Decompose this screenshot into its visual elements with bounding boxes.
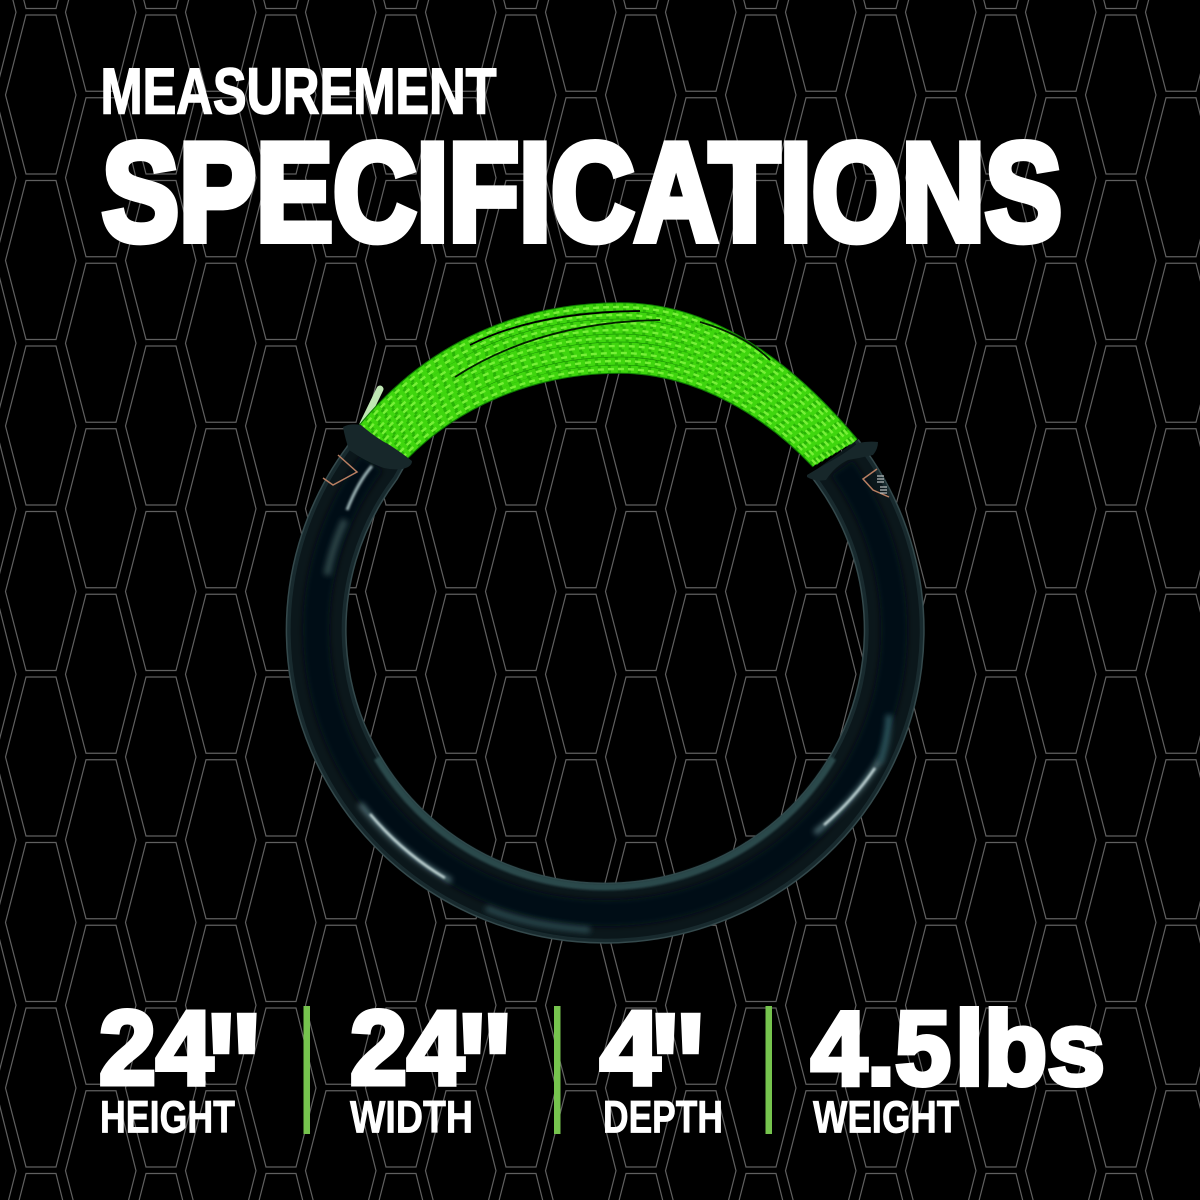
- green twisted wire bundle: [361, 307, 854, 464]
- pale leader tip: [363, 389, 380, 424]
- label: DEPTH: [603, 1092, 723, 1142]
- right copper logo badge: [863, 469, 889, 497]
- label: WIDTH: [350, 1092, 473, 1142]
- left copper logo badge: [323, 455, 357, 485]
- right flange: [807, 442, 878, 481]
- spec: height: [99, 982, 263, 1150]
- left flange: [343, 424, 412, 469]
- divider: [304, 1006, 310, 1134]
- unit: lbs: [955, 990, 1105, 1108]
- spec: depth: [600, 982, 723, 1150]
- spec: width: [350, 982, 514, 1150]
- inch mark: ": [649, 982, 707, 1150]
- title: [100, 54, 1062, 270]
- value: 4: [600, 990, 660, 1107]
- divider: [554, 1006, 560, 1134]
- inch mark: ": [205, 982, 263, 1150]
- inch mark: ": [456, 982, 514, 1150]
- divider: [766, 1006, 772, 1134]
- value: 24: [99, 990, 213, 1107]
- tube highlights: [360, 804, 451, 881]
- label: HEIGHT: [100, 1092, 235, 1142]
- label: WEIGHT: [813, 1092, 959, 1142]
- spec: weight: [811, 990, 1105, 1142]
- black tube housing: [316, 447, 894, 930]
- value: 4.5: [811, 990, 951, 1108]
- value: 24: [350, 990, 464, 1107]
- product: coiled green fish tape in black ring housing: [316, 307, 894, 930]
- heading: measurement: MEASUREMENT: [100, 54, 496, 128]
